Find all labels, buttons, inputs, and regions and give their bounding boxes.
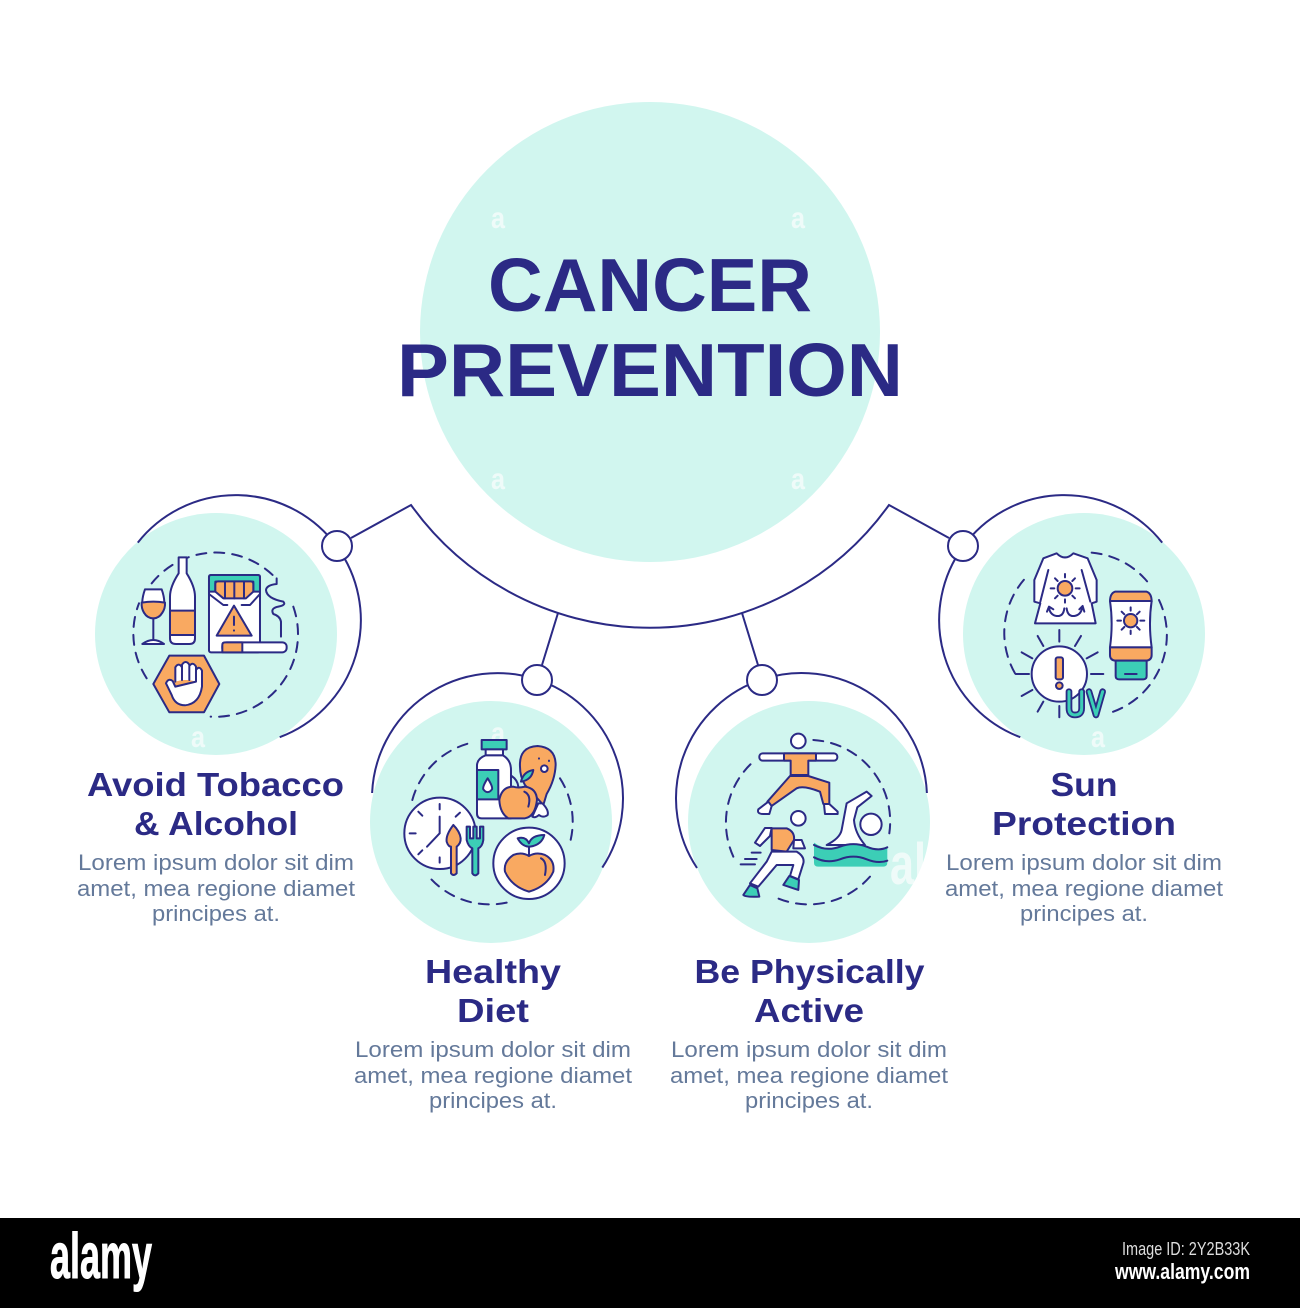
- label: healthy diet: [354, 953, 632, 1113]
- icon: healthy diet: [404, 740, 573, 904]
- watermark marks: a: [1091, 721, 1105, 754]
- watermark marks: a: [791, 202, 805, 235]
- watermark marks: al: [890, 832, 926, 897]
- icon: tobacco and alcohol: [133, 553, 298, 717]
- label: sun protection: principes at.: [1020, 901, 1148, 926]
- connector network: [138, 495, 1162, 868]
- watermark marks: a: [491, 717, 505, 750]
- alamy logo: alamy: [50, 1220, 152, 1292]
- label: healthy diet: amet, mea regione diamet: [354, 1063, 632, 1088]
- watermark marks: a: [491, 202, 505, 235]
- footer bar: [0, 1218, 1300, 1308]
- icon: sun protection: [1004, 553, 1167, 717]
- watermark marks: a: [191, 721, 205, 754]
- title: CANCER: [488, 243, 812, 327]
- title: [397, 243, 903, 412]
- title: PREVENTION: [397, 328, 903, 412]
- label: be physically active: Be Physically: [694, 953, 925, 990]
- small circle backgrounds: [95, 513, 1205, 943]
- label: sun protection: Lorem ipsum dolor sit dim: [946, 850, 1222, 875]
- label: be physically active: principes at.: [745, 1088, 873, 1113]
- label: sun protection: Protection: [992, 805, 1176, 842]
- label: sun protection: amet, mea regione diamet: [945, 876, 1223, 901]
- label: avoid tobacco and alcohol: amet, mea regione diamet: [77, 876, 355, 901]
- watermark marks: [191, 202, 1105, 897]
- label: sun protection: Sun: [1050, 766, 1118, 803]
- label: avoid tobacco and alcohol: [77, 766, 355, 926]
- central circle: [420, 102, 880, 562]
- label: be physically active: [670, 953, 948, 1113]
- image id: Image ID: 2Y2B33K: [1122, 1239, 1250, 1259]
- website: www.alamy.com: [1114, 1259, 1250, 1284]
- label: healthy diet: principes at.: [429, 1088, 557, 1113]
- watermark marks: a: [491, 463, 505, 496]
- label: avoid tobacco and alcohol: Avoid Tobacco: [87, 766, 344, 803]
- label: healthy diet: Healthy: [425, 953, 562, 990]
- watermark marks: a: [791, 463, 805, 496]
- label: avoid tobacco and alcohol: Lorem ipsum dolor sit dim: [78, 850, 354, 875]
- label: sun protection: [945, 766, 1223, 926]
- label: healthy diet: Lorem ipsum dolor sit dim: [355, 1037, 631, 1062]
- label: be physically active: Lorem ipsum dolor sit dim: [671, 1037, 947, 1062]
- label: be physically active: Active: [754, 992, 864, 1029]
- label: avoid tobacco and alcohol: & Alcohol: [134, 805, 298, 842]
- icon: physically active: [726, 734, 890, 904]
- label: healthy diet: Diet: [457, 992, 529, 1029]
- label: avoid tobacco and alcohol: principes at.: [152, 901, 280, 926]
- label: be physically active: amet, mea regione diamet: [670, 1063, 948, 1088]
